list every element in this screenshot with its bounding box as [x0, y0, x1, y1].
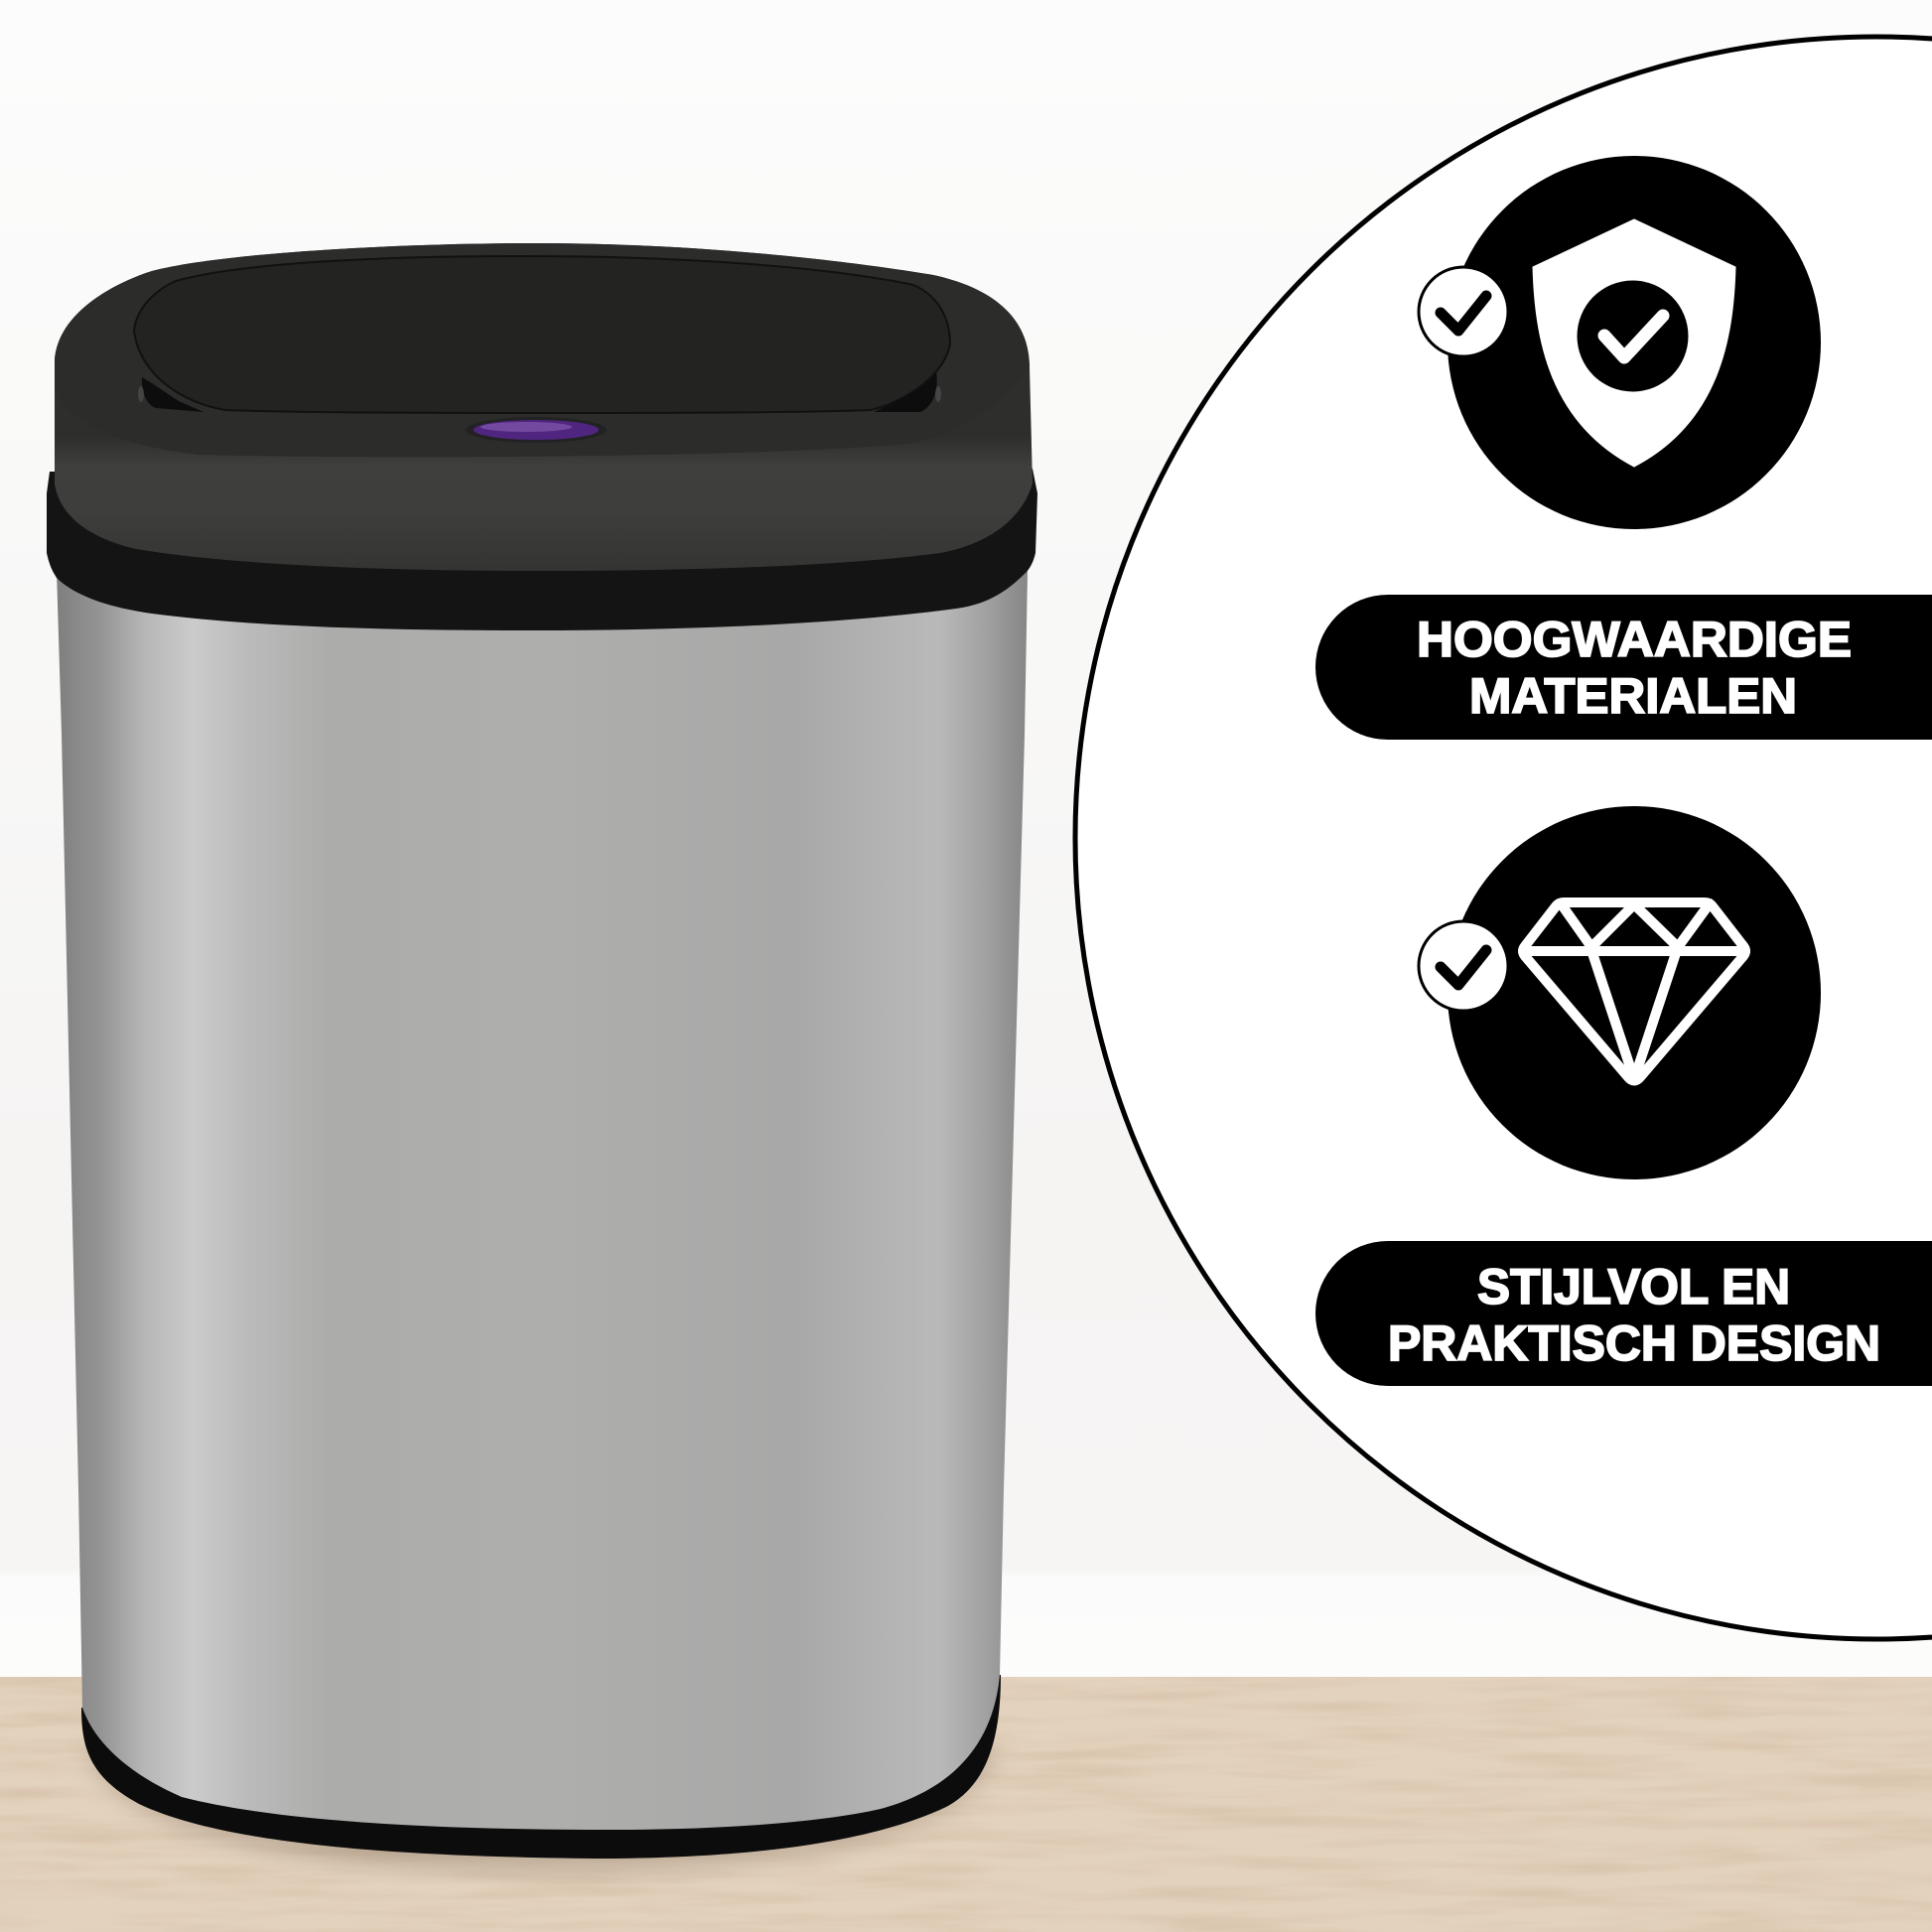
feature 1 label pill	[1315, 595, 1932, 740]
feature 2 icon: diamond in black circle	[1419, 806, 1821, 1179]
feature 1 label pill: MATERIALEN	[1469, 668, 1797, 724]
grey lid side	[55, 243, 1033, 571]
feature 1 icon: shield in black circle	[1419, 156, 1821, 529]
lid opening slots	[142, 377, 204, 412]
feature 2 label pill: PRAKTISCH DESIGN	[1388, 1315, 1880, 1371]
shield check circle	[1577, 280, 1688, 391]
background: wooden floor	[0, 1677, 1932, 1932]
large white circle panel	[1075, 37, 1932, 1639]
rubber base ring	[81, 1675, 1001, 1859]
feature 1 label pill: HOOGWAARDIGE	[1417, 612, 1852, 667]
lid flap	[134, 256, 950, 413]
trash bin product	[47, 243, 1037, 1871]
purple motion sensor	[466, 417, 607, 443]
diamond	[1523, 902, 1745, 1080]
shield	[1533, 219, 1735, 467]
stainless steel body	[57, 571, 1028, 1830]
feature 2 label pill	[1315, 1241, 1932, 1386]
badge check mark	[1441, 950, 1486, 985]
shield check mark	[1604, 316, 1663, 357]
badge check mark	[1441, 296, 1486, 331]
check badge	[1419, 267, 1508, 356]
floor shadow	[84, 1747, 998, 1871]
check badge	[1419, 921, 1508, 1011]
black lid band	[47, 469, 1037, 630]
lid top surface	[55, 243, 1030, 457]
feature 2 label pill: STIJLVOL EN	[1477, 1259, 1790, 1314]
